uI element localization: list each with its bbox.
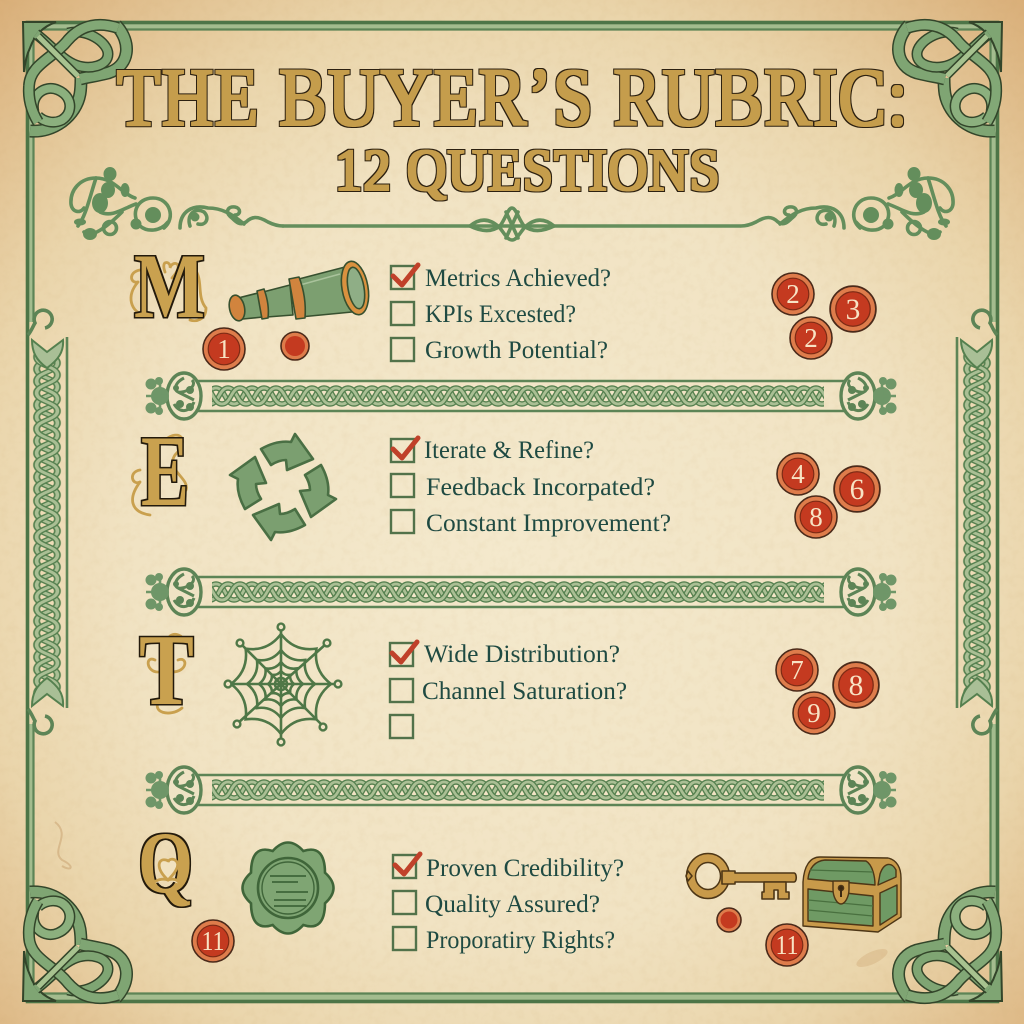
checklist E: Constant Improvement? — [426, 510, 671, 537]
letter T: T — [139, 614, 194, 727]
section M — [131, 235, 876, 370]
badges T: 7 — [790, 655, 804, 685]
section E — [132, 415, 880, 540]
checklist Q — [393, 854, 624, 954]
corner knot: top right — [899, 22, 1002, 131]
icon: telescope — [227, 259, 372, 322]
checklist M — [391, 265, 611, 364]
letter E: E — [141, 415, 189, 528]
badge 11 right — [766, 924, 808, 966]
title: THE BUYER’S RUBRIC: — [117, 51, 909, 143]
checklist Q: Proporatiry Rights? — [426, 927, 615, 954]
checklist M: KPIs Excested? — [425, 301, 576, 328]
checklist T: Channel Saturation? — [422, 678, 627, 705]
badges E: 4 — [791, 459, 805, 489]
icon: key — [686, 858, 796, 899]
subtitle: 12 QUESTIONS — [335, 137, 721, 203]
icon: spider web — [225, 624, 341, 745]
badge 11 left — [192, 920, 234, 962]
corner knot: bottom right — [899, 892, 1002, 1001]
badges E: 6 — [850, 474, 864, 506]
badges M: 2 — [786, 279, 800, 309]
icon: treasure chest — [803, 857, 901, 932]
icon: cycle arrows — [230, 434, 336, 540]
letter E — [132, 415, 189, 528]
icon: wax seal — [242, 842, 334, 934]
badge 11 right: 11 — [776, 930, 798, 960]
badges M: 3 — [846, 294, 860, 326]
checklist E: Iterate & Refine? — [424, 437, 594, 464]
badges T: 8 — [849, 670, 863, 702]
blank badge — [281, 332, 309, 360]
checklist M: Metrics Achieved? — [425, 265, 611, 292]
checklist T: Wide Distribution? — [424, 641, 620, 668]
badge 11 left: 11 — [202, 926, 224, 956]
badge 1: 1 — [217, 334, 231, 364]
section T — [139, 614, 879, 745]
badges M — [772, 273, 876, 359]
checklist M: Growth Potential? — [425, 337, 608, 364]
checklist T — [390, 641, 627, 738]
badge 1 — [203, 328, 245, 370]
section Q — [138, 815, 901, 966]
title flourish divider — [71, 167, 953, 240]
divider 3 — [146, 767, 896, 813]
divider 2 — [146, 569, 896, 615]
letter Q: Q — [138, 815, 193, 912]
letter M: M — [134, 235, 205, 337]
checklist Q: Quality Assured? — [425, 891, 600, 918]
corner knot: bottom left — [23, 892, 126, 1001]
corner knot: top left — [23, 22, 126, 131]
badges M: 2 — [804, 323, 818, 353]
frame curls — [28, 310, 997, 734]
badges E — [777, 453, 880, 538]
side panel: right braid — [957, 337, 993, 708]
blank badge small — [717, 908, 741, 932]
side panel: left braid — [31, 337, 67, 708]
checklist Q: Proven Credibility? — [426, 855, 624, 882]
divider 1 — [146, 373, 896, 419]
badges E: 8 — [809, 502, 823, 532]
checklist E — [391, 437, 671, 537]
badges T: 9 — [807, 698, 821, 728]
badges T — [776, 649, 879, 734]
checklist E: Feedback Incorpated? — [426, 474, 655, 501]
